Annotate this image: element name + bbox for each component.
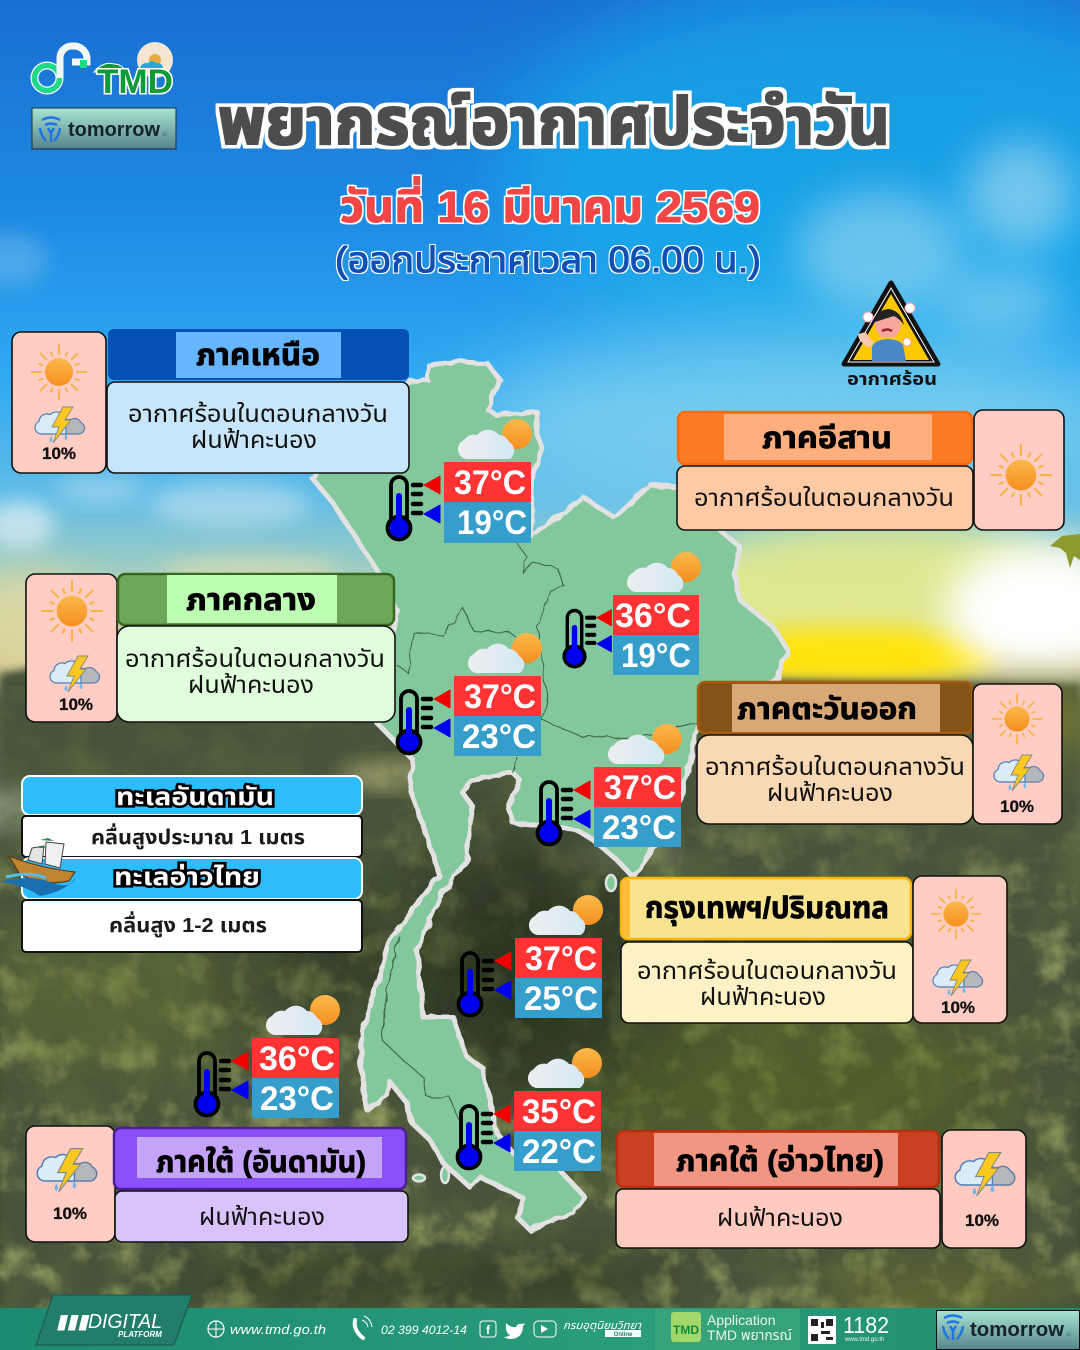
north description: อากาศร้อนในตอนกลางวัน [128,401,388,428]
east description [697,735,973,824]
department online [563,1320,642,1338]
panel: east [697,682,1062,824]
digital platform badge: ▮▮▮DIGITAL [56,1311,162,1333]
temperature: east 37/23: 23°C [602,809,676,847]
tomorrow.io box: .io [1065,1332,1072,1338]
Gulf sea header: ทะเลอ่าวไทย [114,863,260,891]
north description: ฝนฟ้าคะนอง [191,427,317,454]
south Gulf description [616,1189,940,1248]
temperature: south Gulf 35/22 [458,1048,602,1171]
website [208,1321,326,1337]
central header [118,574,394,625]
panel: south Gulf [616,1130,1026,1248]
TMD application: TMD พยากรณ์ [707,1327,792,1343]
Gulf sea waves [22,900,362,952]
panel: northeast [677,410,1064,530]
department online: กรมอุตุนิยมวิทยา [563,1320,642,1332]
east header: ภาคตะวันออก [737,693,917,726]
temperature: Bangkok 37/25 [458,895,603,1018]
central icon box: 10% [59,695,93,714]
map of Thailand [312,362,788,1230]
south Gulf icon box: 10% [965,1211,999,1230]
south Andaman header [114,1128,406,1189]
south Gulf icon box [942,1130,1026,1248]
Bangkok description [621,942,913,1023]
Bangkok description: อากาศร้อนในตอนกลางวัน [637,958,897,985]
logo: tomorrow.io [32,108,176,149]
temperature: northeast 36/19: 36°C [615,597,691,635]
panel: Bangkok [621,876,1007,1023]
east icon box: 10% [1000,797,1034,816]
south Andaman icon box [26,1126,115,1242]
north header [108,329,409,380]
temperature: south Andaman 36/23: 36°C [259,1040,335,1078]
TMD application: Application [707,1312,776,1328]
department online: Online [614,1332,633,1338]
central description: อากาศร้อนในตอนกลางวัน [125,646,385,673]
social icons [480,1321,556,1339]
palm leaf ornament [1050,534,1080,568]
temperature: north 37/19 [388,419,532,543]
TMD application: TMD [673,1323,699,1337]
temperature: northeast 36/19: 19°C [621,637,691,675]
TMD application [655,1309,800,1350]
social icons: f [486,1323,491,1337]
temperature: south Gulf 35/22: 22°C [522,1133,596,1171]
temperature: south Gulf 35/22: 35°C [522,1093,596,1131]
north icon box: 10% [42,444,76,463]
south Gulf description: ฝนฟ้าคะนอง [717,1205,843,1232]
panel: south Andaman [26,1126,408,1242]
Bangkok header: กรุงเทพฯ/ปริมณฑล [645,892,889,926]
issue time: (ออกประกาศเวลา 06.00 น.) [335,239,761,280]
panel: north [12,329,409,473]
tomorrow.io box: tomorrow [970,1319,1064,1341]
south Andaman description: ฝนฟ้าคะนอง [199,1204,325,1231]
phone: 02 399 4012-14 [381,1325,467,1337]
digital platform badge: PLATFORM [118,1330,162,1339]
northeast header [678,412,972,464]
logo: de and TMD [34,42,173,101]
footer bar [0,1295,1080,1350]
tomorrow.io box [936,1310,1080,1350]
central description: ฝนฟ้าคะนอง [188,672,314,699]
temperature: northeast 36/19 [564,552,701,675]
Bangkok icon box [913,876,1007,1023]
QR and 1182 [808,1312,889,1344]
Gulf sea waves: คลื่นสูง 1-2 เมตร [109,911,267,937]
panel: central [26,574,395,722]
Andaman sea header [22,776,362,815]
QR and 1182: www.tmd.go.th [844,1337,884,1343]
north description [107,382,409,473]
temperature: Bangkok 37/25: 25°C [524,980,598,1018]
temperature: central 37/23: 23°C [462,718,536,756]
south Gulf header [617,1131,939,1187]
temperature: north 37/19: 19°C [457,504,527,542]
digital platform badge [36,1295,192,1345]
website: www.tmd.go.th [230,1322,326,1337]
south Andaman icon box: 10% [53,1204,87,1223]
north icon box [12,332,106,473]
Andaman sea waves [22,816,362,857]
northeast header: ภาคอีสาน [762,422,892,455]
icon: ship [0,838,76,896]
logo: tomorrow.io: tomorrow [68,119,160,141]
north header: ภาคเหนือ [196,339,320,372]
central header: ภาคกลาง [186,584,316,617]
south Gulf header: ภาคใต้ (อ่าวไทย) [676,1145,884,1178]
logo: tomorrow.io: .io [161,132,168,138]
east icon box [973,684,1062,824]
icon: heat warning: อากาศร้อน [847,369,937,389]
temperature: Bangkok 37/25: 37°C [525,940,597,978]
northeast description: อากาศร้อนในตอนกลางวัน [694,485,954,512]
temperature: central 37/23 [398,633,542,756]
temperature: central 37/23: 37°C [464,678,536,716]
central icon box [26,574,117,722]
Bangkok icon box: 10% [941,998,975,1017]
date: วันที่ 16 มีนาคม 2569 [340,176,760,232]
panel: sea conditions [0,776,362,952]
temperature: north 37/19: 37°C [454,464,526,502]
south Andaman header: ภาคใต้ (อันดามัน) [156,1146,366,1179]
temperature: south Andaman 36/23: 23°C [260,1080,334,1118]
east description: อากาศร้อนในตอนกลางวัน [705,754,965,781]
south Andaman description [115,1191,408,1242]
Andaman sea header: ทะเลอันดามัน [116,783,274,811]
Andaman sea waves: คลื่นสูงประมาณ 1 เมตร [91,823,305,849]
Gulf sea header [22,858,362,899]
title: พยากรณ์อากาศประจำวัน [218,84,890,158]
northeast description [677,466,973,530]
QR and 1182: 1182 [843,1312,889,1338]
icon: heat warning [844,283,938,389]
phone [355,1316,467,1338]
Bangkok description: ฝนฟ้าคะนอง [700,984,826,1011]
temperature: east 37/23: 37°C [604,769,676,807]
east header [698,682,972,733]
Bangkok header [621,878,911,939]
northeast icon box [974,410,1064,530]
logo: de and TMD: TMD [97,63,173,101]
east description: ฝนฟ้าคะนอง [767,780,893,807]
central description [117,626,395,722]
temperature: south Andaman 36/23 [196,995,340,1118]
temperature: east 37/23 [538,724,682,847]
